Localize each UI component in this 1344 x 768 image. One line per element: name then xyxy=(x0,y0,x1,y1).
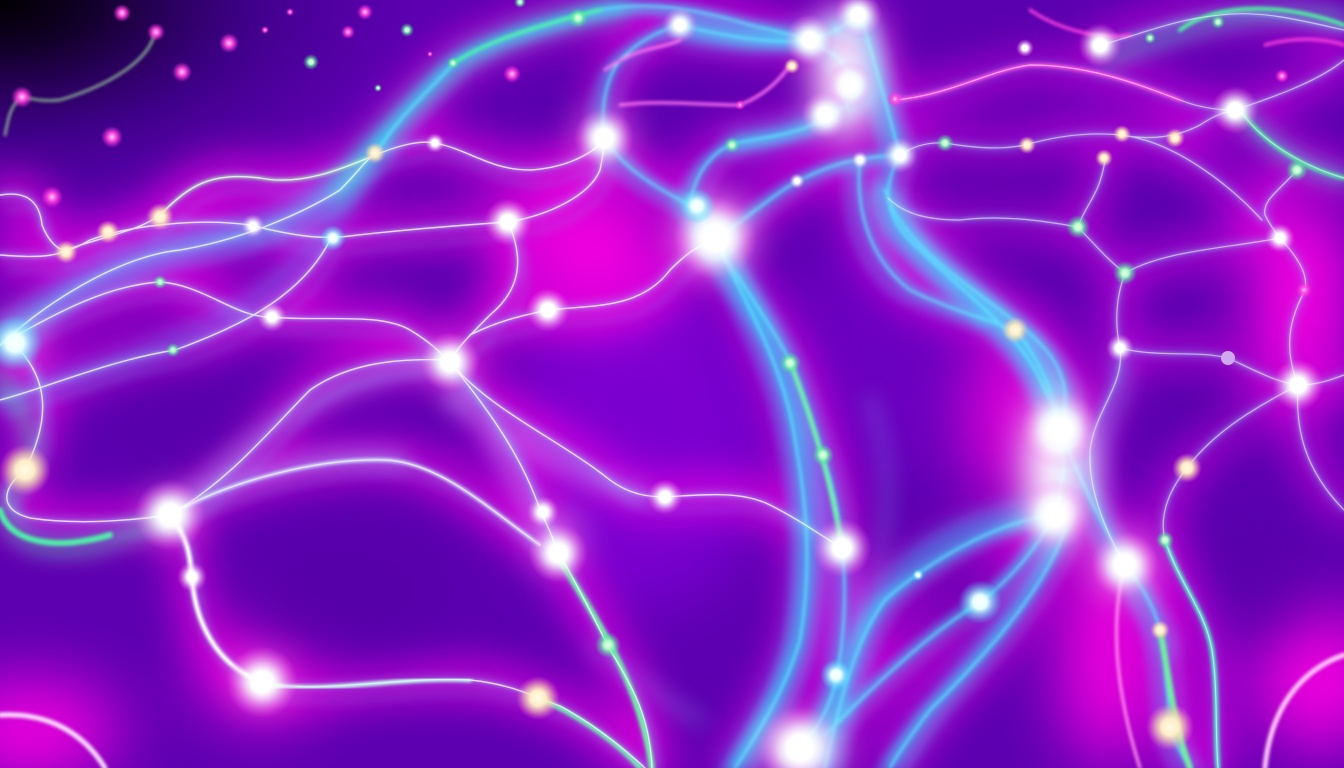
dark purple pockets xyxy=(100,10,1295,650)
glowing nodes: magenta particles xyxy=(11,4,1312,298)
magenta glow patches xyxy=(0,180,1344,768)
